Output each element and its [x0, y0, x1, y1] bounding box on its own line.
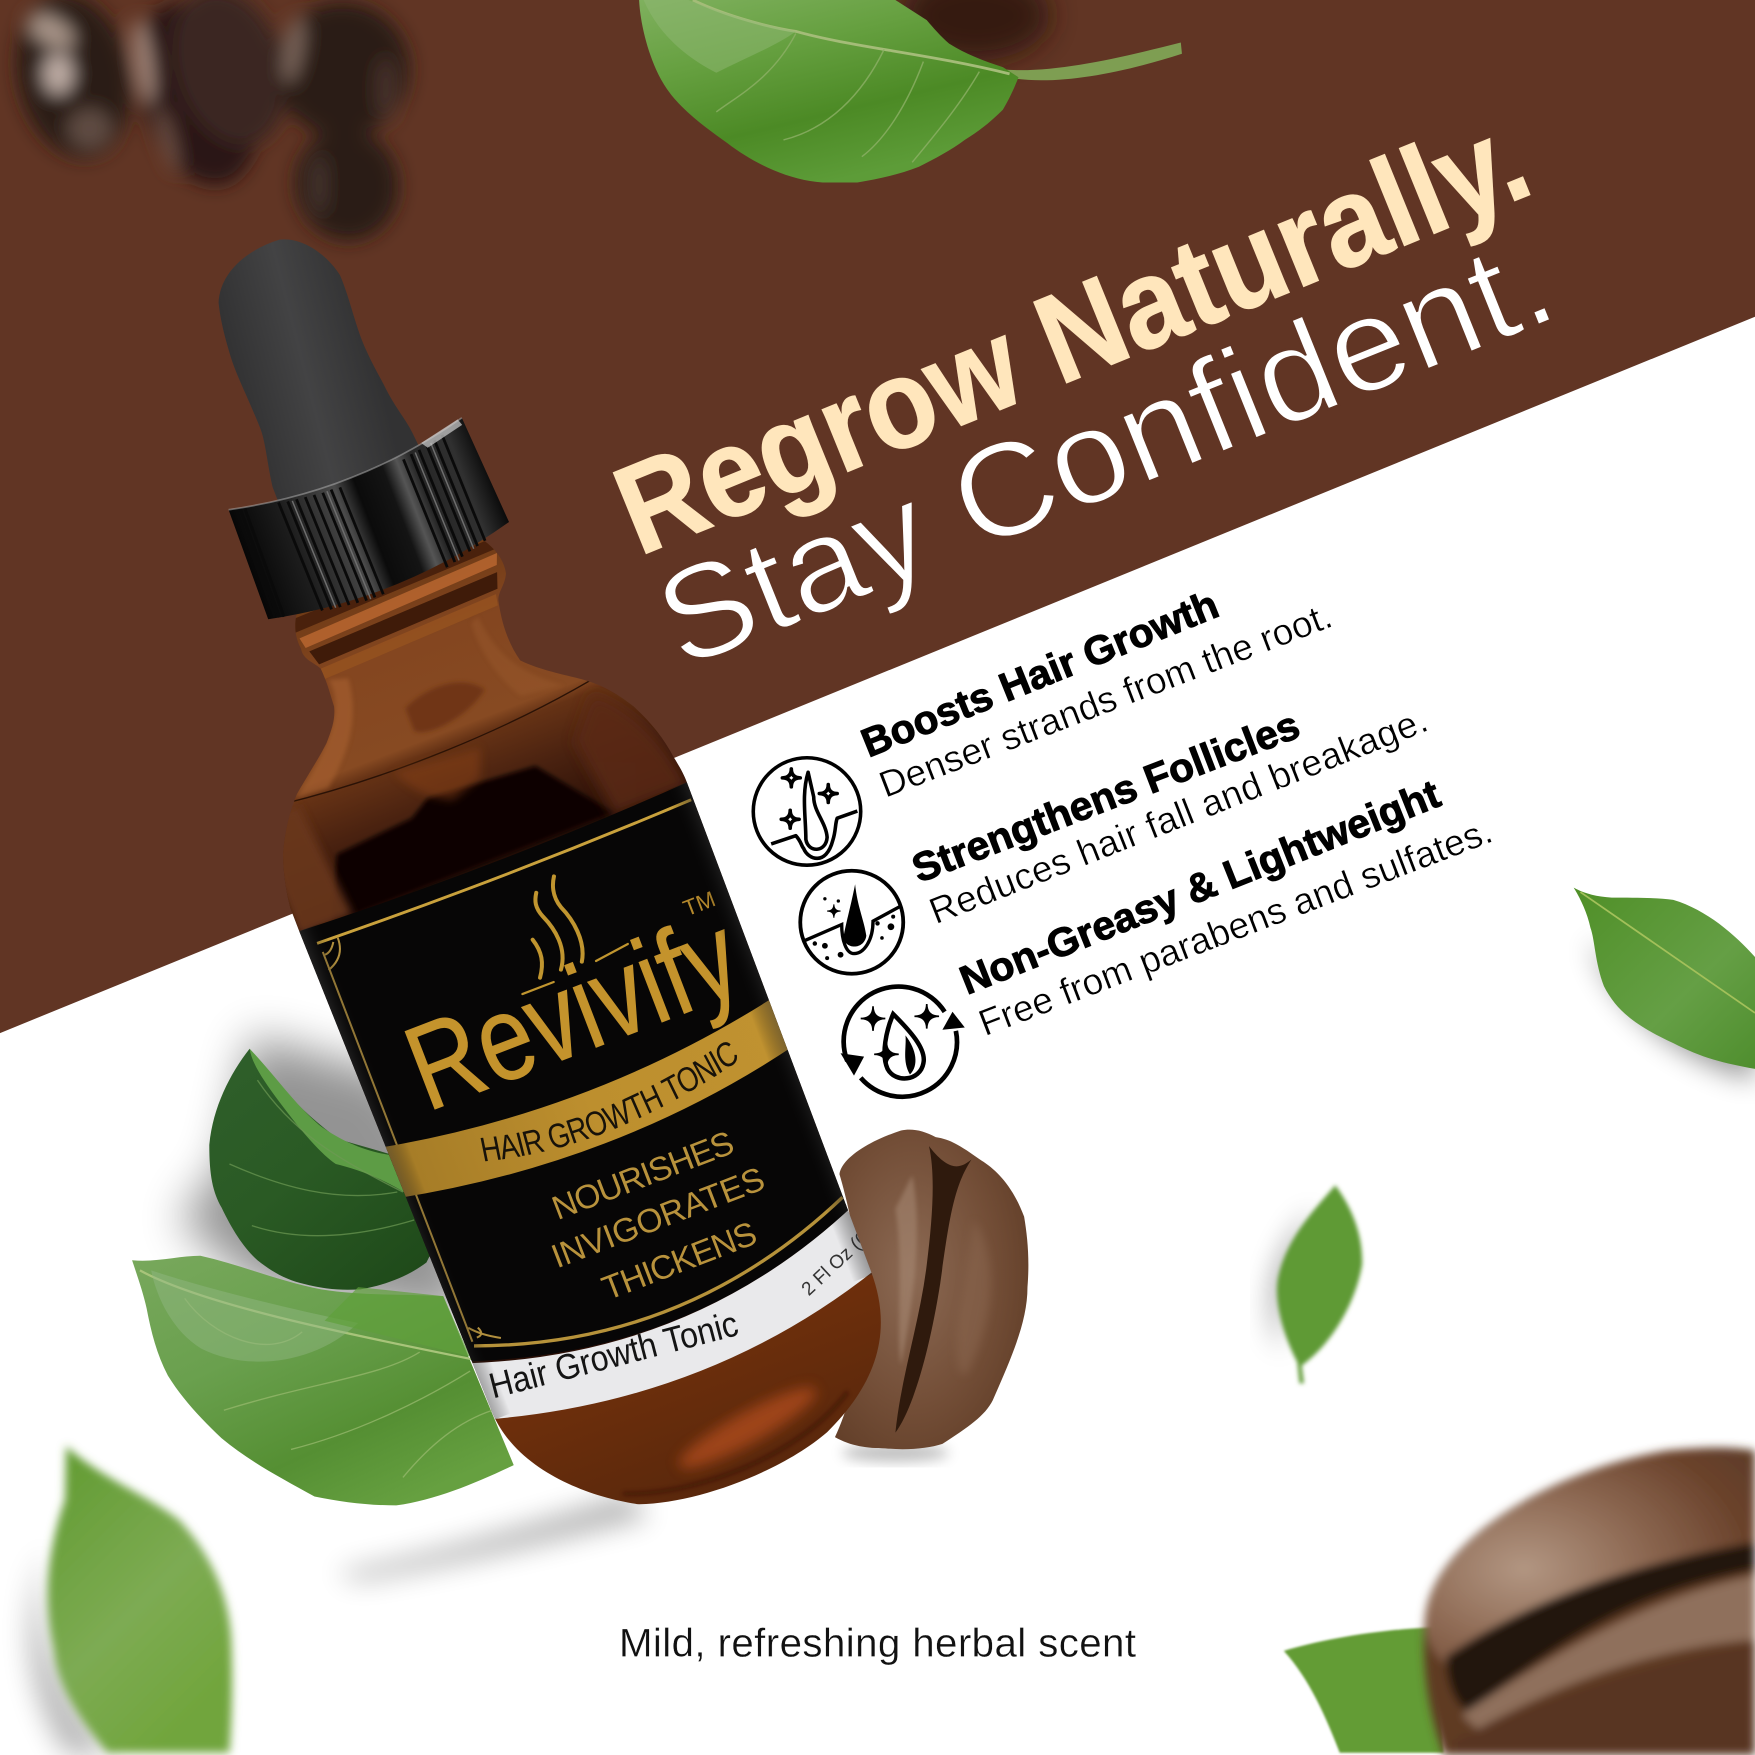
trademark: TM: [680, 886, 719, 921]
product name on strip: Hair Growth Tonic: [485, 1304, 742, 1406]
benefit words: NOURISHES: [547, 1125, 739, 1228]
benefit words: INVIGORATES: [547, 1161, 770, 1276]
caption: scent note: Mild, refreshing herbal scent: [619, 1621, 1136, 1666]
small blurred leaf: [1271, 1185, 1362, 1383]
heading: Non-Greasy & Lightweight: Non-Greasy & Lightweight: [954, 771, 1446, 1003]
label edge shading: [299, 782, 876, 1422]
dark green leaf: [209, 1049, 442, 1290]
white strip: [472, 1210, 872, 1419]
blurred green leaf, bottom left: [29, 1446, 232, 1755]
benefit words: [552, 1132, 764, 1298]
blurred leaf under big coffee bean: [1284, 1627, 1444, 1753]
text: Reduces hair fall: Reduces hair fall and breakage.: [924, 699, 1433, 932]
right green leaf: [1574, 888, 1755, 1080]
text: Denser strands: Denser strands from the root.: [874, 595, 1338, 806]
heading: Boosts Hair Growth: Boosts Hair Growth: [855, 582, 1225, 766]
shadow behind left leaves: [179, 1035, 470, 1321]
ribbed cap: [226, 415, 517, 636]
heading: Regrow Naturally: Regrow Naturally.: [596, 86, 1547, 581]
gold border left: [319, 935, 501, 1348]
heading: Stay Confident: Stay Confident.: [637, 204, 1573, 696]
top leaf shadow on brown: [902, 0, 1050, 60]
label: [299, 782, 872, 1419]
band text: HAIR GROWTH TONIC: [480, 1042, 737, 1162]
feature: strengthens follicles: [800, 699, 1433, 974]
gold band: [386, 1000, 788, 1197]
gold border bottom: [474, 1196, 844, 1348]
blurred coffee beans, top left: [2, 0, 427, 249]
rubber dropper bulb: [191, 219, 427, 519]
black label panel: [299, 782, 848, 1362]
product bottle: [218, 240, 881, 1504]
volume: 2 Fl Oz (60 ml): [798, 1199, 904, 1300]
top green leaf with stem: [639, 0, 1182, 182]
small coffee bean behind bottle: [835, 1130, 1028, 1462]
feature: boosts hair growth: [753, 582, 1338, 865]
big blurred coffee bean, bottom right: [1424, 1448, 1755, 1755]
brand name: Revivify: [388, 887, 757, 1136]
hair logo: [521, 874, 629, 996]
benefit words: THICKENS: [597, 1215, 762, 1308]
gold border top: [317, 800, 692, 946]
panel: brown diagonal band: [0, 0, 1755, 1033]
icon: hair follicle with sparkles: [753, 758, 861, 865]
large green leaf: [132, 1256, 514, 1505]
feature: non-greasy and lightweight: [841, 771, 1498, 1097]
icon: droplet with circular arrows: [841, 987, 965, 1097]
glass body: [190, 498, 928, 1559]
heading: Strengthens Follicles: Strengthens Follicles: [906, 702, 1306, 891]
text: Free from parabens: Free from parabens and sulfates.: [973, 810, 1498, 1044]
icon: hair root in scalp: [800, 871, 903, 974]
bottle ground shadow: [336, 1494, 649, 1580]
glass reflections: [190, 504, 925, 1549]
